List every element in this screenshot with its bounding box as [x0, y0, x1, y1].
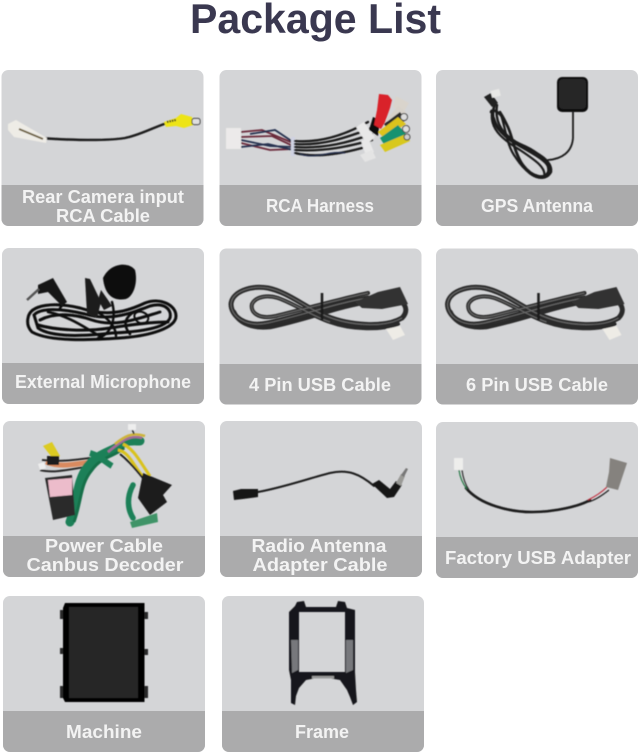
- icon: rear camera cable: [8, 114, 200, 143]
- label: External Microphone: [15, 372, 191, 392]
- label: Rear Camera input: [22, 187, 184, 207]
- panel: RCA harness: [220, 70, 422, 226]
- label: GPS Antenna: [481, 196, 594, 216]
- panel: radio antenna adapter cable: [220, 421, 422, 577]
- label: [26, 536, 184, 575]
- icon: 6 pin USB cable: [448, 287, 624, 340]
- label: Radio Antenna: [252, 536, 388, 556]
- icon: RCA harness: [226, 94, 410, 162]
- icon: 4 pin USB cable: [231, 287, 408, 340]
- icon: factory USB adapter: [454, 458, 627, 512]
- label: RCA Cable: [56, 206, 150, 226]
- label: 4 Pin USB Cable: [249, 375, 391, 395]
- label: [252, 536, 388, 575]
- label: Power Cable: [45, 536, 163, 556]
- panel: external microphone: [2, 248, 204, 404]
- panel: 4 pin USB cable: [220, 248, 422, 405]
- icon: microphone: [27, 265, 176, 340]
- label: Machine: [66, 722, 142, 742]
- label: Frame: [295, 722, 349, 742]
- label: Factory USB Adapter: [445, 548, 631, 568]
- icon: mounting frame: [289, 601, 357, 705]
- label: Canbus Decoder: [26, 555, 184, 575]
- icon: power cable and decoder: [38, 424, 172, 528]
- panel: GPS antenna: [436, 70, 638, 226]
- panel: machine: [3, 596, 205, 752]
- icon: head unit screen: [60, 603, 148, 702]
- panel: frame: [222, 596, 424, 752]
- panel: power cable canbus decoder: [3, 421, 205, 577]
- label: 6 Pin USB Cable: [466, 375, 608, 395]
- label: Adapter Cable: [252, 555, 388, 575]
- panel: factory USB adapter: [436, 422, 638, 578]
- label: RCA Harness: [266, 196, 374, 216]
- icon: radio antenna adapter: [233, 468, 408, 500]
- panel: rear camera input RCA cable: [2, 70, 204, 226]
- icon: GPS antenna: [484, 77, 588, 178]
- panel: 6 pin USB cable: [436, 248, 638, 405]
- label: [22, 187, 184, 226]
